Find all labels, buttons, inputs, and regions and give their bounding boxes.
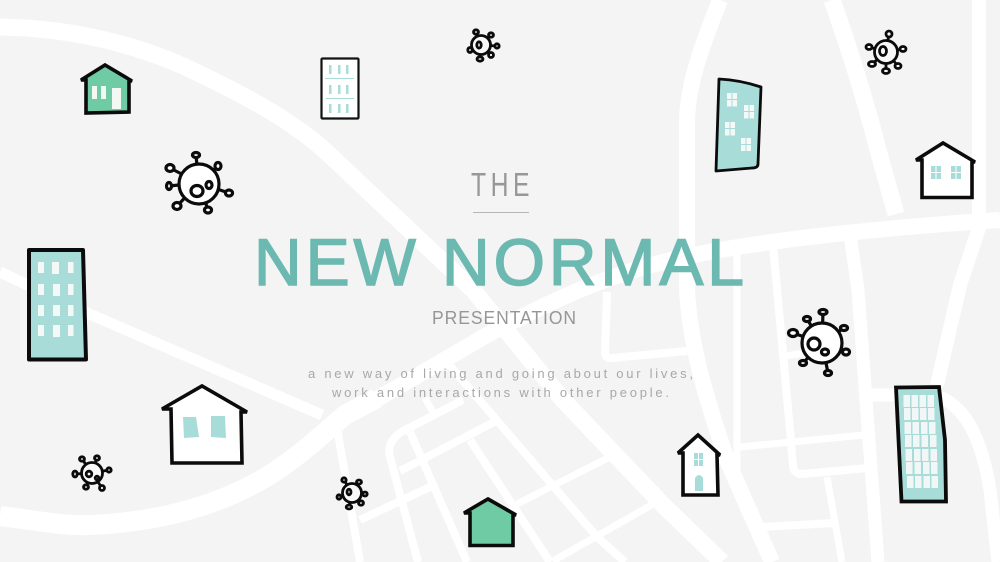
- icon: white house lower left: [162, 386, 247, 463]
- icon: teal tower lower right: [896, 387, 946, 502]
- subtitle: PRESENTATION: PRESENTATION: [432, 307, 577, 328]
- divider under THE: [473, 212, 529, 213]
- body text: work and interactions with other people.: [331, 385, 669, 400]
- heading: THE: THE: [471, 166, 534, 203]
- icon: small virus lower left: [73, 456, 111, 490]
- icon: small white house: [678, 435, 720, 495]
- icon: small virus top centre: [468, 30, 499, 61]
- icon: white house upper right: [916, 143, 975, 198]
- icon: large virus upper left: [166, 152, 232, 213]
- body text: [308, 366, 693, 400]
- icon: green house bottom: [464, 499, 516, 546]
- icon: large virus right: [788, 310, 850, 376]
- title: NEW NORMAL: NEW NORMAL: [254, 225, 744, 299]
- icon: teal building left: [29, 250, 86, 360]
- body text: a new way of living and going about our lives,: [308, 366, 693, 381]
- icon: small virus top right: [866, 31, 906, 74]
- icon: small virus bottom centre: [337, 478, 367, 509]
- icon: teal building upper right: [716, 79, 761, 171]
- icon: white tower top centre: [322, 58, 358, 118]
- icon: green house top left: [81, 65, 132, 113]
